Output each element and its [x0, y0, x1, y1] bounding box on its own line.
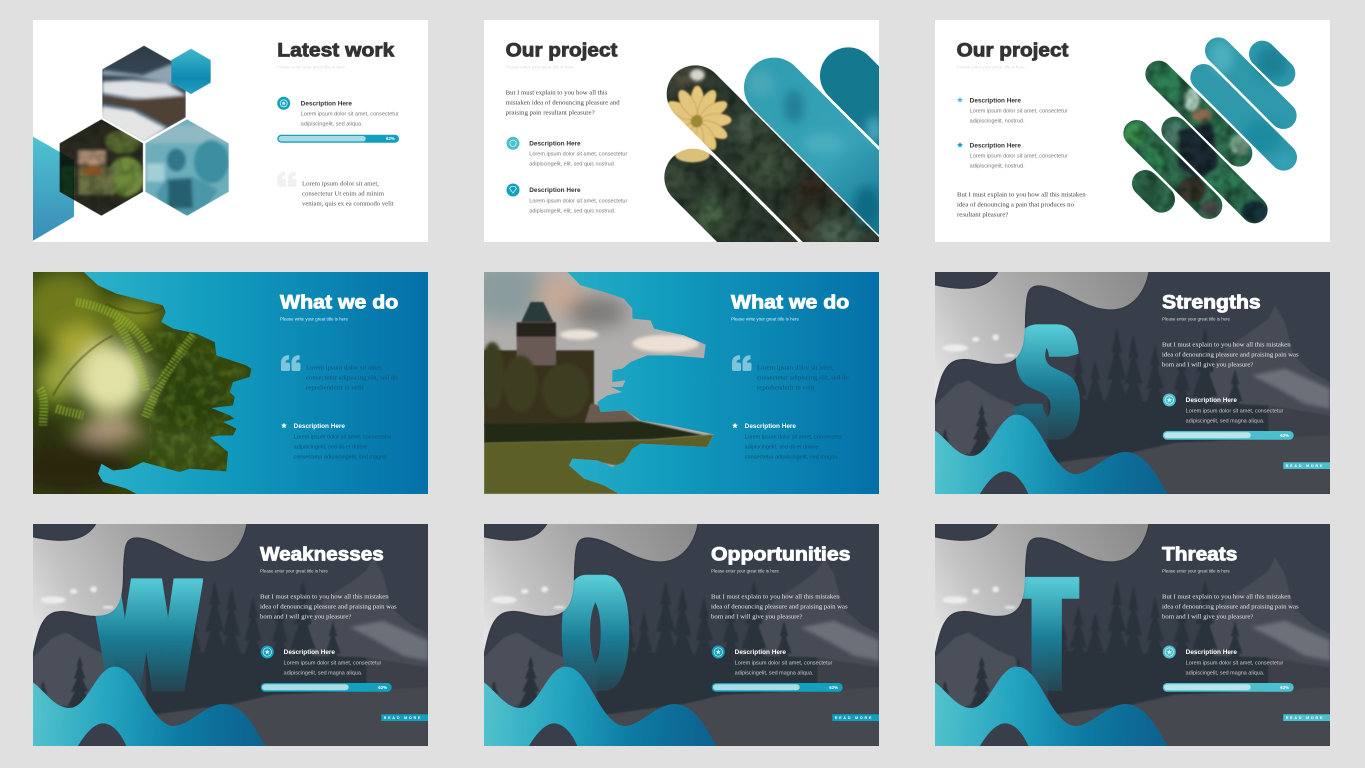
description: Description Here: [1186, 397, 1238, 404]
diagonal capsule photo: [664, 47, 879, 242]
forest background: [483, 524, 879, 746]
subtitle: Please write your great title is here: [280, 317, 349, 322]
icon: star: [957, 97, 963, 102]
description: consectetur adipiscingelit, sed magna: [745, 454, 837, 460]
quote text: consectetur adipiscing elit, sed do: [757, 375, 849, 382]
slide 5: what we do with building: [464, 262, 879, 494]
description 2: [529, 187, 628, 214]
description: consectetur adipiscingelit, sed magna: [294, 454, 386, 460]
description 2: Lorem ipsum dolor sit amet, consectetur: [529, 198, 628, 204]
description 2: Lorem ipsum dolor sit amet, consectetur: [970, 154, 1068, 160]
title: Our project: [506, 41, 618, 62]
description: adipiscingelit, sed do et dolore: [745, 444, 818, 450]
organic shapes: [935, 272, 1168, 494]
progress bar 62%: 62%: [829, 685, 838, 690]
icon: star badge: [261, 646, 274, 658]
description: [294, 423, 392, 460]
subtitle: Please enter your great title is here: [1162, 317, 1231, 322]
slide 9: threats: [934, 524, 1330, 746]
slide 3: our project with hiker: [935, 20, 1330, 242]
organic shapes: [935, 524, 1168, 746]
description: adipiscingelit, sed do et dolore: [294, 444, 367, 450]
description: Description Here: [284, 649, 336, 656]
intro text: idea of denouncing pleasure and praising pain was: [260, 604, 397, 611]
intro text: praising pain resultant pleasure?: [506, 110, 595, 117]
intro text: born and I will give you pleasure?: [1162, 614, 1253, 621]
organic shapes: [33, 524, 266, 746]
slide 6: strengths: [934, 272, 1330, 494]
description: [735, 649, 833, 676]
quote text: Lorem ipsum dolor sit amet,: [757, 365, 834, 372]
quote mark: [281, 355, 300, 371]
quote text: [306, 365, 398, 392]
subtitle: Please enter your great title is here: [957, 65, 1025, 70]
progress bar 62%: [261, 683, 392, 692]
subtitle: Please enter your great title is here: [506, 65, 574, 70]
torn-edge building photo: [484, 272, 714, 494]
description: adipiscingelit, sed aliqua.: [301, 121, 363, 127]
quote text: Lorem ipsum dolor sit amet,: [302, 181, 379, 188]
description: Description Here: [735, 649, 787, 656]
intro text: [1162, 342, 1299, 369]
title: Strengths: [1162, 293, 1261, 314]
progress bar 62%: [277, 135, 399, 143]
read more button: READ MORE: [384, 716, 421, 720]
description 2: adipiscingelit, nostrud.: [970, 164, 1025, 170]
description: Lorem ipsum dolor sit amet, consectetur: [284, 660, 382, 666]
forest background: [934, 524, 1330, 746]
intro text: idea of denouncing pleasure and praising pain was: [711, 604, 848, 611]
subtitle: Please enter your great title is here: [711, 569, 780, 574]
description 1: Lorem ipsum dolor sit amet, consectetur: [970, 109, 1068, 115]
quote text: reprehenderit in velit: [306, 385, 364, 392]
subtitle: Please enter your great title is here: [277, 65, 346, 70]
progress bar 62%: 62%: [1280, 685, 1289, 690]
description 1: Description Here: [970, 97, 1022, 104]
organic shapes: [484, 524, 717, 746]
title: Threats: [1162, 545, 1237, 566]
torn-edge leaf photo: [33, 272, 252, 494]
slide 7: weaknesses: [32, 524, 428, 746]
quote text: [757, 365, 849, 392]
read more button: READ MORE: [835, 716, 872, 720]
intro text: [260, 594, 397, 621]
intro text: But I must explain to you how all this mistaken: [711, 594, 840, 601]
diagonal capsule photo: [1123, 37, 1297, 224]
intro text: mistaken idea of denouncing pleasure and: [506, 100, 620, 107]
quote text: reprehenderit in velit: [757, 385, 815, 392]
quote mark: [732, 355, 752, 371]
title: Weaknesses: [260, 545, 384, 566]
description 1: adipiscingelit, nostrud.: [970, 119, 1025, 125]
big letter S: S: [1020, 292, 1074, 471]
read more button: [832, 714, 879, 721]
slide 1: latest work: [33, 20, 428, 242]
intro text: born and I will give you pleasure?: [711, 614, 802, 621]
description 1: [529, 140, 628, 168]
description 1: adipiscingelit, elit, sed quis nostrud.: [529, 162, 615, 168]
intro text: idea of denouncing pleasure and praising pain was: [1162, 604, 1299, 611]
intro text: But I must explain to you how all this mistaken: [1162, 594, 1291, 601]
icon: target: [277, 97, 290, 110]
read more button: [1283, 462, 1330, 469]
title: Opportunities: [711, 545, 850, 566]
description: adipiscingelit, sed magna aliqua.: [1186, 670, 1264, 676]
intro text: But I must explain to you how all this mistaken: [260, 594, 389, 601]
description: [1186, 397, 1284, 424]
quote text: consectetur adipiscing elit, sed do: [306, 375, 398, 382]
quote text: veniam, quis ex ea commodo velit: [302, 201, 394, 208]
big letter O: O: [568, 545, 623, 723]
description 2: adipiscingelit, elit, sed quis nostrud.: [529, 208, 615, 214]
intro text: But I must explain to you how all this: [506, 90, 608, 97]
description: Lorem ipsum dolor sit amet, consectetur: [745, 434, 843, 440]
big letter W: W: [96, 545, 196, 724]
title: What we do: [731, 293, 849, 314]
closing text: But I must explain to you how all this mistaken: [957, 192, 1086, 199]
slide 4: what we do with leaves: [10, 272, 428, 495]
quote mark: [277, 172, 296, 187]
description: [745, 423, 843, 460]
description 2: Description Here: [529, 187, 581, 194]
description: [301, 100, 399, 127]
quote text: [302, 181, 394, 208]
progress bar 62%: 62%: [378, 685, 387, 690]
hexagon photo collage: [33, 43, 230, 241]
subtitle: Please enter your great title is here: [1162, 569, 1231, 574]
description: adipiscingelit, sed magna aliqua.: [284, 670, 362, 676]
read more button: READ MORE: [1286, 464, 1323, 468]
progress bar 62%: 62%: [1280, 433, 1289, 438]
icon: layers: [506, 137, 520, 150]
description: Lorem ipsum dolor sit amet, consectetur: [1186, 408, 1284, 414]
description: adipiscingelit, sed magna aliqua.: [1186, 418, 1264, 424]
slide 2: our project with flower: [484, 20, 884, 248]
icon: diamond: [506, 184, 520, 196]
icon: star badge: [1163, 394, 1176, 406]
description: [1186, 649, 1284, 676]
intro text: But I must explain to you how all this mistaken: [1162, 342, 1291, 349]
intro text: [506, 90, 620, 117]
description: Lorem ipsum dolor sit amet, consectetur: [301, 112, 399, 118]
quote text: consectetur Ut enim ad minim: [302, 191, 384, 198]
icon: star badge: [712, 646, 725, 658]
description 1: Lorem ipsum dolor sit amet, consectetur: [529, 152, 628, 158]
description: adipiscingelit, sed magna aliqua.: [735, 670, 813, 676]
description: [284, 649, 382, 676]
progress bar 62%: [1163, 431, 1294, 440]
read more button: [1283, 714, 1330, 721]
description: Lorem ipsum dolor sit amet, consectetur: [1186, 660, 1284, 666]
intro text: born and I will give you pleasure?: [260, 614, 351, 621]
intro text: [1162, 594, 1299, 621]
closing text: idea of denouncing a pain that produces no: [957, 202, 1074, 209]
intro text: born and I will give you pleasure?: [1162, 362, 1253, 369]
title: What we do: [280, 293, 398, 314]
description 1: [970, 97, 1068, 125]
big letter T: T: [1023, 544, 1071, 723]
progress bar 62%: 62%: [386, 136, 395, 141]
icon: star: [732, 423, 738, 428]
closing text: [957, 192, 1086, 219]
read more button: [381, 714, 428, 721]
small teal hexagon: [171, 49, 211, 94]
intro text: idea of denouncing pleasure and praising pain was: [1162, 352, 1299, 359]
icon: star: [281, 423, 287, 428]
subtitle: Please enter your great title is here: [260, 569, 329, 574]
description 2: [970, 142, 1068, 170]
description: Description Here: [294, 423, 346, 430]
forest background: [934, 272, 1330, 494]
large translucent hexagon: [33, 137, 74, 241]
forest background: [32, 524, 428, 746]
progress bar 62%: [712, 683, 843, 692]
description: Description Here: [1186, 649, 1238, 656]
description: Description Here: [745, 423, 797, 430]
description: Lorem ipsum dolor sit amet, consectetur: [735, 660, 833, 666]
title: Our project: [957, 41, 1069, 62]
description: Description Here: [301, 100, 353, 107]
closing text: resultant pleasure?: [957, 212, 1008, 219]
description 2: Description Here: [970, 142, 1022, 149]
read more button: READ MORE: [1286, 716, 1323, 720]
slide 8: opportunities: [483, 524, 879, 746]
description: Lorem ipsum dolor sit amet, consectetur: [294, 434, 392, 440]
intro text: [711, 594, 848, 621]
icon: star: [957, 142, 963, 147]
subtitle: Please write your great title is here: [731, 317, 800, 322]
description 1: Description Here: [529, 140, 581, 147]
icon: star badge: [1163, 646, 1176, 658]
title: Latest work: [277, 41, 395, 62]
progress bar 62%: [1163, 683, 1294, 692]
quote text: Lorem ipsum dolor sit amet,: [306, 365, 383, 372]
